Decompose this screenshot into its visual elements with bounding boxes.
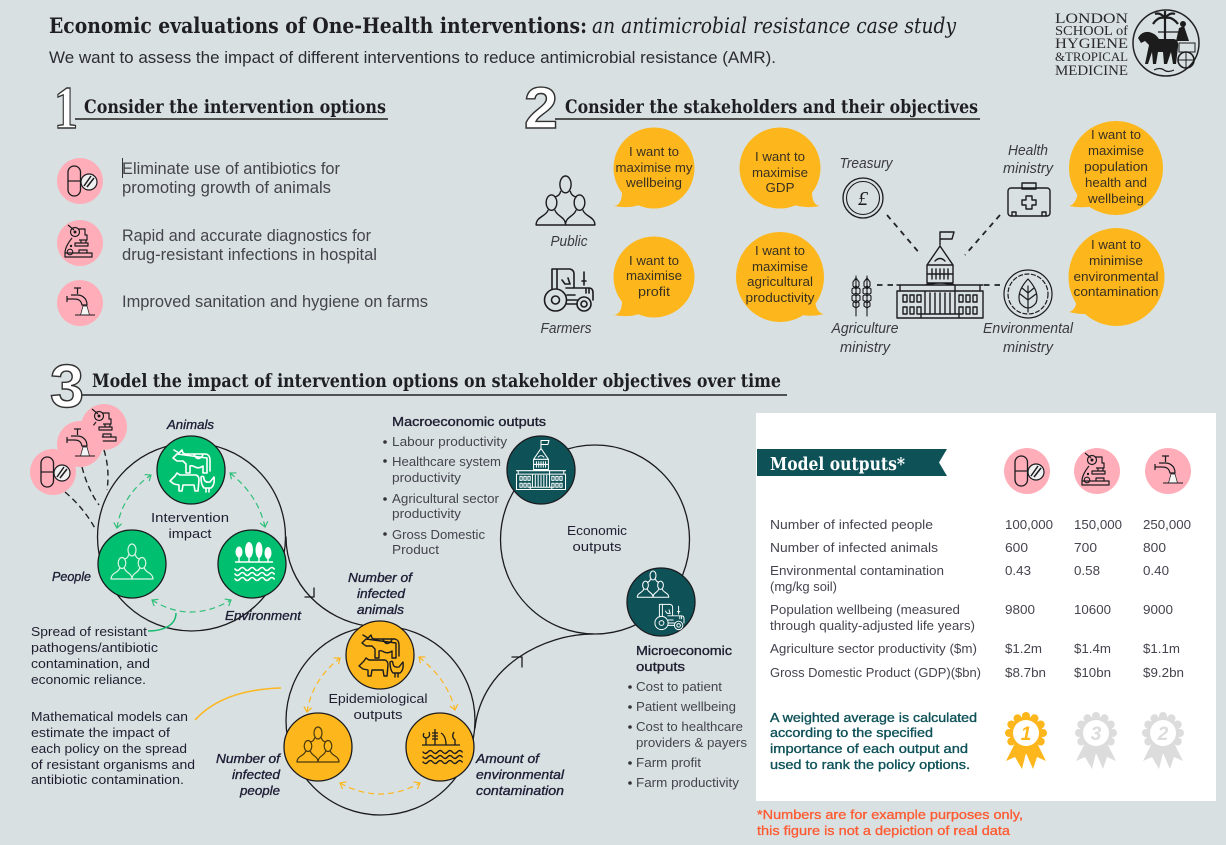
- bubble: agriculture objective: productivity: [746, 290, 815, 305]
- text: weighted average: importance of each output and: [770, 741, 968, 756]
- label: health ministry: ministry: [1003, 161, 1054, 177]
- icons: policy options: [30, 404, 127, 495]
- label: number of infected people: infected: [232, 767, 281, 782]
- bubble: agriculture objective: maximise: [752, 259, 808, 274]
- row: environmental contamination: Environmental contamination: [770, 563, 944, 578]
- logo: London School of Hygiene & Tropical Medicine: HYGIENE: [1055, 36, 1128, 52]
- icon: leaf in circle: [1004, 270, 1052, 318]
- list: microeconomic outputs: Microeconomic: [636, 643, 733, 658]
- label: agriculture ministry: Agriculture: [831, 321, 898, 337]
- label: health ministry: Health: [1008, 143, 1048, 159]
- icon: coin: £: [858, 188, 869, 210]
- label: economic outputs: [567, 523, 628, 554]
- row: environmental contamination: 0.43: [1005, 563, 1031, 578]
- bubble: treasury objective: [740, 128, 820, 208]
- section 3 heading: [50, 353, 787, 420]
- callout: spread of resistant pathogens: pathogens/antibiotic: [31, 640, 159, 655]
- list: macroeconomic outputs: Labour productivity: [392, 434, 508, 449]
- node: macroeconomic: [507, 436, 575, 504]
- panel: epidemiological outputs cycle: [216, 570, 565, 815]
- text: sanitation: Improved sanitation and hygiene on farms: [122, 293, 428, 311]
- row: environmental contamination: 0.40: [1143, 563, 1169, 578]
- green circular arrows: [117, 473, 265, 612]
- label: economic outputs: Economic: [567, 523, 628, 538]
- label: epidemiological outputs: outputs: [354, 707, 403, 722]
- bubble: agriculture objective: I want to: [755, 243, 805, 258]
- rosette: rank 2: [1142, 712, 1184, 769]
- callout: mathematical models: estimate the impact of: [31, 725, 170, 740]
- label: number of infected people: people: [239, 783, 280, 798]
- label: number of infected people: Number of: [216, 751, 281, 766]
- logo: London School of Hygiene & Tropical Medicine: MEDICINE: [1055, 63, 1128, 79]
- bubble: agriculture objective: agricultural: [747, 274, 813, 289]
- text: diagnostics: drug-resistant infections in hospital: [122, 246, 377, 264]
- bubble: public objective: I want to: [629, 144, 679, 159]
- subtitle: We want to assess the impact of different interventions to reduce antimicrobial resistance (AMR).: [49, 49, 776, 67]
- label: intervention impact: Intervention: [151, 510, 229, 525]
- list: microeconomic outputs: Cost to patient: [636, 679, 722, 694]
- bubble: farmers objective: I want to: [629, 253, 679, 268]
- cursor line: [122, 158, 124, 178]
- text: weighted average: according to the specified: [770, 725, 933, 740]
- bubble: treasury objective: maximise: [752, 165, 808, 180]
- logo: London School of Hygiene & Tropical Medicine: SCHOOL of: [1055, 24, 1128, 39]
- row: agriculture productivity: $1.1m: [1143, 641, 1180, 656]
- row: infected people: 250,000: [1143, 517, 1191, 532]
- bubble: health objective: I want to: [1091, 127, 1141, 142]
- panel: intervention options: [57, 158, 428, 326]
- list: macroeconomic outputs: productivity: [392, 506, 462, 521]
- dashed connectors: [877, 215, 1004, 285]
- callout: mathematical models: [31, 688, 281, 787]
- list: microeconomic outputs: Patient wellbeing: [636, 699, 736, 714]
- bubble: public objective: wellbeing: [625, 175, 682, 190]
- label: environment: Environment: [225, 608, 302, 623]
- label: environmental ministry: [983, 321, 1074, 356]
- rosette: rank 1: 1: [1021, 724, 1031, 745]
- list: microeconomic outputs: [628, 643, 748, 790]
- list: macroeconomic outputs: Healthcare system: [392, 454, 501, 469]
- node: environmental contamination: [406, 713, 474, 781]
- text: eliminate antibiotics: Eliminate use of antibiotics for: [122, 160, 340, 178]
- label: environmental ministry: ministry: [1003, 340, 1054, 356]
- bubble: environment objective: [1068, 228, 1164, 326]
- label: number of infected animals: Number of: [348, 570, 413, 585]
- section 2 heading: [524, 76, 980, 141]
- bubble: environment objective: I want to: [1091, 237, 1141, 252]
- callout: spread of resistant pathogens: economic reliance.: [31, 672, 146, 687]
- text: eliminate antibiotics: [122, 160, 340, 197]
- label: number of infected animals: animals: [357, 602, 405, 617]
- node: environment: [218, 530, 286, 598]
- label: public: Public: [550, 234, 588, 250]
- section 3 heading: 3: [50, 353, 84, 420]
- icons: table headers: [1004, 448, 1191, 494]
- banner: model outputs: [757, 449, 947, 476]
- label: farmers: Farmers: [540, 321, 592, 337]
- callout: mathematical models: each policy on the spread: [31, 741, 187, 756]
- text: diagnostics: [122, 227, 377, 264]
- row: infected animals: 800: [1143, 540, 1166, 555]
- label: intervention impact: [151, 510, 229, 541]
- label: intervention impact: impact: [168, 526, 212, 541]
- rosette: rank 1: [1005, 712, 1047, 769]
- icon: public: [536, 176, 595, 225]
- bubble: public objective: [614, 128, 694, 208]
- panel: stakeholders: [536, 121, 1164, 356]
- rosette: rank 2: 2: [1157, 724, 1169, 745]
- connector: intervention to epidemiological: [286, 537, 367, 626]
- row: infected animals: [770, 540, 1166, 555]
- row: infected people: Number of infected people: [770, 517, 933, 532]
- bubble: farmers objective: profit: [638, 284, 670, 299]
- section 2 heading: 2: [524, 76, 558, 141]
- list: microeconomic outputs: providers & payers: [636, 735, 748, 750]
- row: population wellbeing: through quality-adjusted life years): [770, 618, 975, 633]
- callout: mathematical models: Mathematical models can: [31, 709, 188, 724]
- list: macroeconomic outputs: [383, 414, 547, 557]
- row: infected people: 150,000: [1074, 517, 1122, 532]
- list: macroeconomic outputs: Agricultural sector: [392, 491, 500, 506]
- icon: wheat: [852, 276, 871, 316]
- list: microeconomic outputs: Farm profit: [636, 755, 701, 770]
- node: infected animals: [346, 621, 414, 689]
- footnote: [757, 807, 1023, 838]
- title: an antimicrobial resistance case study: [592, 14, 957, 38]
- label: treasury: Treasury: [840, 156, 893, 172]
- icon: medical kit: [1008, 183, 1050, 216]
- label: animals: Animals: [166, 417, 214, 432]
- callout: mathematical models: of resistant organisms and: [31, 757, 195, 772]
- bubble: health objective: population: [1084, 159, 1148, 174]
- list: macroeconomic outputs: Gross Domestic: [392, 527, 485, 542]
- rosette: rank 3: [1075, 712, 1117, 769]
- title: Economic evaluations of One-Health interventions:: [49, 13, 587, 38]
- icon: government building: [897, 232, 983, 318]
- callout: spread of resistant pathogens: Spread of resistant: [31, 624, 147, 639]
- bubble: public objective: maximise my: [616, 160, 693, 175]
- text: eliminate antibiotics: promoting growth of animals: [122, 179, 331, 197]
- bubble: farmers objective: maximise: [626, 268, 682, 283]
- row: population wellbeing: 9000: [1143, 602, 1173, 617]
- row: GDP: Gross Domestic Product (GDP)($bn): [770, 665, 981, 680]
- bubble: treasury objective: I want to: [755, 149, 805, 164]
- node: infected people: [284, 713, 352, 781]
- bubble: treasury objective: GDP: [766, 180, 794, 195]
- callout: spread of resistant pathogens: [31, 613, 176, 687]
- label: number of infected animals: [348, 570, 413, 617]
- row: infected people: 100,000: [1005, 517, 1053, 532]
- section 2 heading: Consider the stakeholders and their objectives: [565, 97, 978, 118]
- list: macroeconomic outputs: productivity: [392, 470, 462, 485]
- section 1 heading: Consider the intervention options: [84, 97, 386, 118]
- row: agriculture productivity: $1.2m: [1005, 641, 1042, 656]
- bubble: agriculture objective: [736, 232, 824, 322]
- callout: spread of resistant pathogens: contamination, and: [31, 656, 150, 671]
- logo: London School of Hygiene & Tropical Medicine: [1055, 10, 1199, 79]
- row: environmental contamination: 0.58: [1074, 563, 1100, 578]
- row: infected people: [770, 517, 1191, 532]
- text: diagnostics: Rapid and accurate diagnostics for: [122, 227, 371, 245]
- label: epidemiological outputs: [328, 691, 428, 722]
- label: agriculture ministry: [831, 321, 898, 356]
- label: amount of environmental contamination: [475, 751, 565, 798]
- label: people: People: [52, 569, 91, 584]
- text: weighted average: A weighted average is calculated: [770, 710, 977, 725]
- row: infected animals: 700: [1074, 540, 1097, 555]
- section 3 heading: Model the impact of intervention options on stakeholder objectives over time: [92, 371, 781, 392]
- bubble: environment objective: contamination: [1074, 284, 1158, 299]
- row: GDP: $10bn: [1074, 665, 1111, 680]
- bubble: environment objective: environmental: [1074, 269, 1159, 284]
- row: GDP: $8.7bn: [1005, 665, 1046, 680]
- section 1 heading: [54, 75, 388, 141]
- row: population wellbeing: 9800: [1005, 602, 1035, 617]
- icon: coin: [843, 178, 883, 218]
- node: people: [98, 530, 166, 598]
- label: number of infected people: [216, 751, 281, 798]
- label: amount of environmental contamination: Amount of: [475, 751, 540, 766]
- rosette: rank 3: 3: [1091, 724, 1102, 745]
- node: microeconomic: [627, 568, 695, 636]
- logo: London School of Hygiene & Tropical Medicine: &TROPICAL: [1055, 49, 1128, 64]
- label: health ministry: [1003, 143, 1054, 177]
- row: agriculture productivity: $1.4m: [1074, 641, 1111, 656]
- bubble: health objective: wellbeing: [1087, 191, 1144, 206]
- callout: mathematical models: antibiotic contamination.: [31, 772, 184, 787]
- list: microeconomic outputs: Farm productivity: [636, 775, 740, 790]
- row: agriculture productivity: [770, 641, 1180, 656]
- footnote: this figure is not a depiction of real data: [757, 823, 1011, 838]
- list: macroeconomic outputs: Product: [392, 542, 439, 557]
- label: environmental ministry: Environmental: [983, 321, 1074, 337]
- panel: economic outputs cycle: [500, 436, 695, 636]
- row: population wellbeing: Population wellbeing (measured: [770, 602, 960, 617]
- row: environmental contamination: (mg/kg soil): [770, 579, 837, 594]
- label: amount of environmental contamination: contamination: [476, 783, 564, 798]
- panel: intervention impact cycle: [30, 404, 302, 631]
- connector: epidemiological to economic: [475, 634, 593, 728]
- row: population wellbeing: 10600: [1074, 602, 1111, 617]
- row: GDP: $9.2bn: [1143, 665, 1184, 680]
- list: microeconomic outputs: outputs: [636, 659, 686, 674]
- text: weighted average: used to rank the policy options.: [770, 757, 970, 772]
- row: agriculture productivity: Agriculture sector productivity ($m): [770, 641, 977, 656]
- text: weighted average: [770, 710, 977, 772]
- label: amount of environmental contamination: environmental: [476, 767, 565, 782]
- row: population wellbeing: [770, 602, 1173, 633]
- bubble: farmers objective: [614, 236, 694, 318]
- label: epidemiological outputs: Epidemiological: [328, 691, 428, 706]
- label: economic outputs: outputs: [572, 539, 622, 554]
- row: infected animals: Number of infected animals: [770, 540, 939, 555]
- panel: model outputs: [756, 413, 1216, 801]
- bubble: environment objective: minimise: [1089, 253, 1143, 268]
- label: agriculture ministry: ministry: [840, 340, 891, 356]
- icon: pill: [57, 158, 103, 204]
- row: GDP: [770, 665, 1184, 680]
- list: microeconomic outputs: Cost to healthcare: [636, 719, 743, 734]
- footnote: *Numbers are for example purposes only,: [757, 807, 1023, 822]
- bubble: health objective: health and: [1085, 175, 1147, 190]
- title: [49, 13, 957, 38]
- logo: London School of Hygiene & Tropical Medicine: LONDON: [1055, 11, 1128, 27]
- dashed lines from policies: [65, 450, 108, 530]
- node: animals: [157, 436, 225, 504]
- label: number of infected animals: infected: [357, 586, 406, 601]
- row: environmental contamination: [770, 563, 1169, 594]
- section 1 heading: 1: [54, 75, 78, 141]
- list: macroeconomic outputs: Macroeconomic outputs: [392, 414, 547, 429]
- banner: model outputs: Model outputs*: [770, 455, 905, 475]
- bubble: health objective: maximise: [1088, 143, 1144, 158]
- icon: tap: [57, 280, 103, 326]
- icon: microscope: [57, 220, 103, 266]
- row: infected animals: 600: [1005, 540, 1028, 555]
- bubble: health objective: [1069, 121, 1163, 215]
- icon: tractor: [544, 269, 593, 311]
- orange circular arrows: [307, 657, 455, 794]
